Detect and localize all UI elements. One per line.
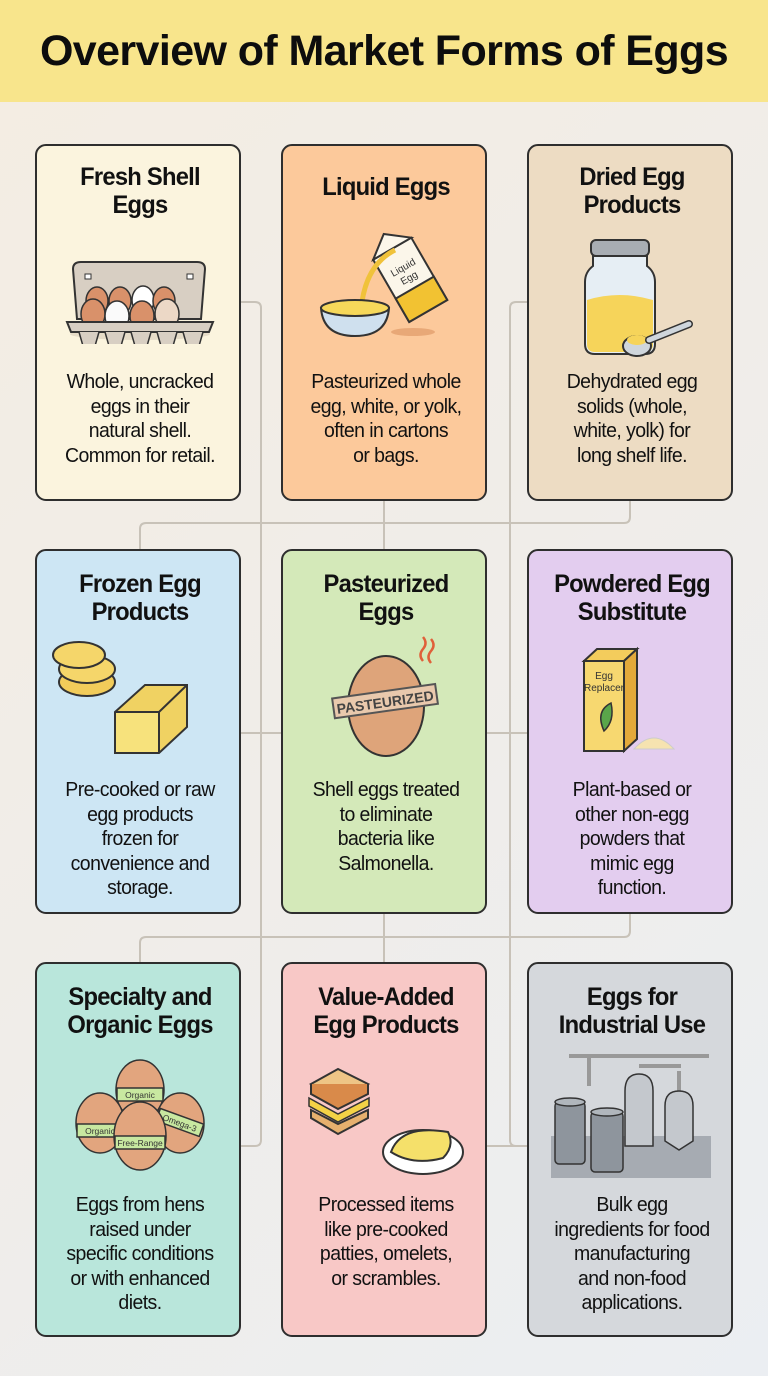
description: Shell eggs treated: [313, 778, 459, 801]
description: or bags.: [353, 444, 419, 467]
description: long shelf life.: [577, 444, 687, 467]
heading: Industrial Use: [559, 1011, 705, 1039]
icon: labeled eggs: Organic: [125, 1090, 156, 1100]
description: Processed items: [318, 1193, 454, 1216]
description: Dehydrated egg: [567, 370, 697, 393]
icon: labeled eggs: Free-Range: [117, 1138, 163, 1148]
description: or with enhanced: [70, 1267, 210, 1290]
panel: dried egg products: [527, 144, 733, 501]
description: natural shell.: [89, 419, 191, 442]
panel: value-added egg products: [281, 962, 487, 1337]
icon: egg with stamp: [331, 636, 439, 757]
icon: carton pouring into bowl: Egg: [399, 269, 420, 288]
heading: Products: [584, 191, 680, 219]
heading: Pasteurized: [324, 570, 448, 598]
description: [66, 1193, 214, 1314]
heading: [313, 983, 459, 1039]
icon: egg replacer box: Replacer: [584, 683, 625, 694]
description: [65, 778, 216, 899]
icon: egg replacer box: Egg: [595, 671, 613, 682]
description: powders that: [580, 827, 684, 850]
description: solids (whole,: [577, 395, 687, 418]
icon: egg carton: [66, 261, 214, 344]
description: [311, 370, 461, 467]
description: egg, white, or yolk,: [311, 395, 461, 418]
heading: [79, 570, 201, 626]
description: [573, 778, 692, 899]
panel: liquid eggs: [281, 144, 487, 501]
description: eggs in their: [91, 395, 189, 418]
description: [567, 370, 697, 467]
description: egg products: [87, 803, 193, 826]
description: convenience and: [71, 852, 209, 875]
heading: Eggs: [358, 598, 414, 626]
title: [0, 0, 768, 102]
title: Overview of Market Forms of Eggs: [40, 27, 728, 75]
description: and non-food: [578, 1267, 686, 1290]
description: raised under: [89, 1218, 191, 1241]
panel: specialty and organic eggs: [35, 962, 241, 1337]
icon: sandwich and omelet: [308, 1068, 464, 1175]
description: Whole, uncracked: [67, 370, 213, 393]
heading: [324, 570, 448, 626]
description: to eliminate: [340, 803, 432, 826]
panel: frozen egg products: [35, 549, 241, 914]
heading: Eggs for: [587, 983, 677, 1011]
description: applications.: [582, 1291, 682, 1314]
icon: egg replacer box: [582, 646, 675, 754]
heading: Liquid Eggs: [322, 173, 450, 201]
description: or scrambles.: [331, 1267, 441, 1290]
icon: patties and frozen block: [52, 641, 188, 754]
description: [65, 370, 215, 467]
heading: Value-Added: [318, 983, 454, 1011]
description: diets.: [118, 1291, 162, 1314]
heading: Specialty and: [68, 983, 212, 1011]
heading: Fresh Shell: [80, 163, 200, 191]
heading: Powdered Egg: [554, 570, 710, 598]
heading: Organic Eggs: [67, 1011, 213, 1039]
description: Bulk egg: [596, 1193, 668, 1216]
heading: Eggs: [112, 191, 168, 219]
description: frozen for: [102, 827, 178, 850]
description: Plant-based or: [573, 778, 691, 801]
description: manufacturing: [574, 1242, 690, 1265]
icon: egg with stamp: PASTEURIZED: [336, 687, 435, 717]
description: Pasteurized whole: [311, 370, 461, 393]
description: storage.: [107, 876, 173, 899]
description: [318, 1193, 454, 1290]
description: white, yolk) for: [574, 419, 690, 442]
description: other non-egg: [575, 803, 689, 826]
panel: pasteurized eggs: [281, 549, 487, 914]
heading: [579, 163, 685, 219]
description: bacteria like: [338, 827, 434, 850]
heading: Products: [92, 598, 188, 626]
heading: [554, 570, 710, 626]
description: Eggs from hens: [76, 1193, 204, 1216]
description: mimic egg: [590, 852, 674, 875]
heading: Substitute: [578, 598, 686, 626]
description: [313, 778, 459, 875]
icon: labeled eggs: Organic: [85, 1126, 116, 1136]
heading: [67, 983, 213, 1039]
description: often in cartons: [324, 419, 448, 442]
panel: eggs for industrial use: [527, 962, 733, 1337]
description: Pre-cooked or raw: [65, 778, 215, 801]
description: specific conditions: [66, 1242, 214, 1265]
description: patties, omelets,: [320, 1242, 452, 1265]
heading: Egg Products: [313, 1011, 459, 1039]
icon: factory tanks and barrels: [551, 1054, 711, 1178]
icon: carton pouring into bowl: [320, 232, 449, 337]
icon: carton pouring into bowl: Liquid: [389, 257, 418, 280]
panel: fresh shell eggs: [35, 144, 241, 501]
description: Common for retail.: [65, 444, 215, 467]
description: function.: [598, 876, 666, 899]
description: ingredients for food: [554, 1218, 710, 1241]
description: like pre-cooked: [324, 1218, 448, 1241]
heading: Frozen Egg: [79, 570, 201, 598]
description: Salmonella.: [338, 852, 434, 875]
heading: [80, 163, 200, 219]
panel: powdered egg substitute: [527, 549, 733, 914]
icon: jar with scoop: [584, 239, 693, 357]
icon: labeled eggs: [75, 1059, 205, 1171]
heading: [559, 983, 706, 1039]
description: [554, 1193, 710, 1314]
icon: labeled eggs: Omega-3: [161, 1112, 198, 1134]
heading: Dried Egg: [579, 163, 685, 191]
